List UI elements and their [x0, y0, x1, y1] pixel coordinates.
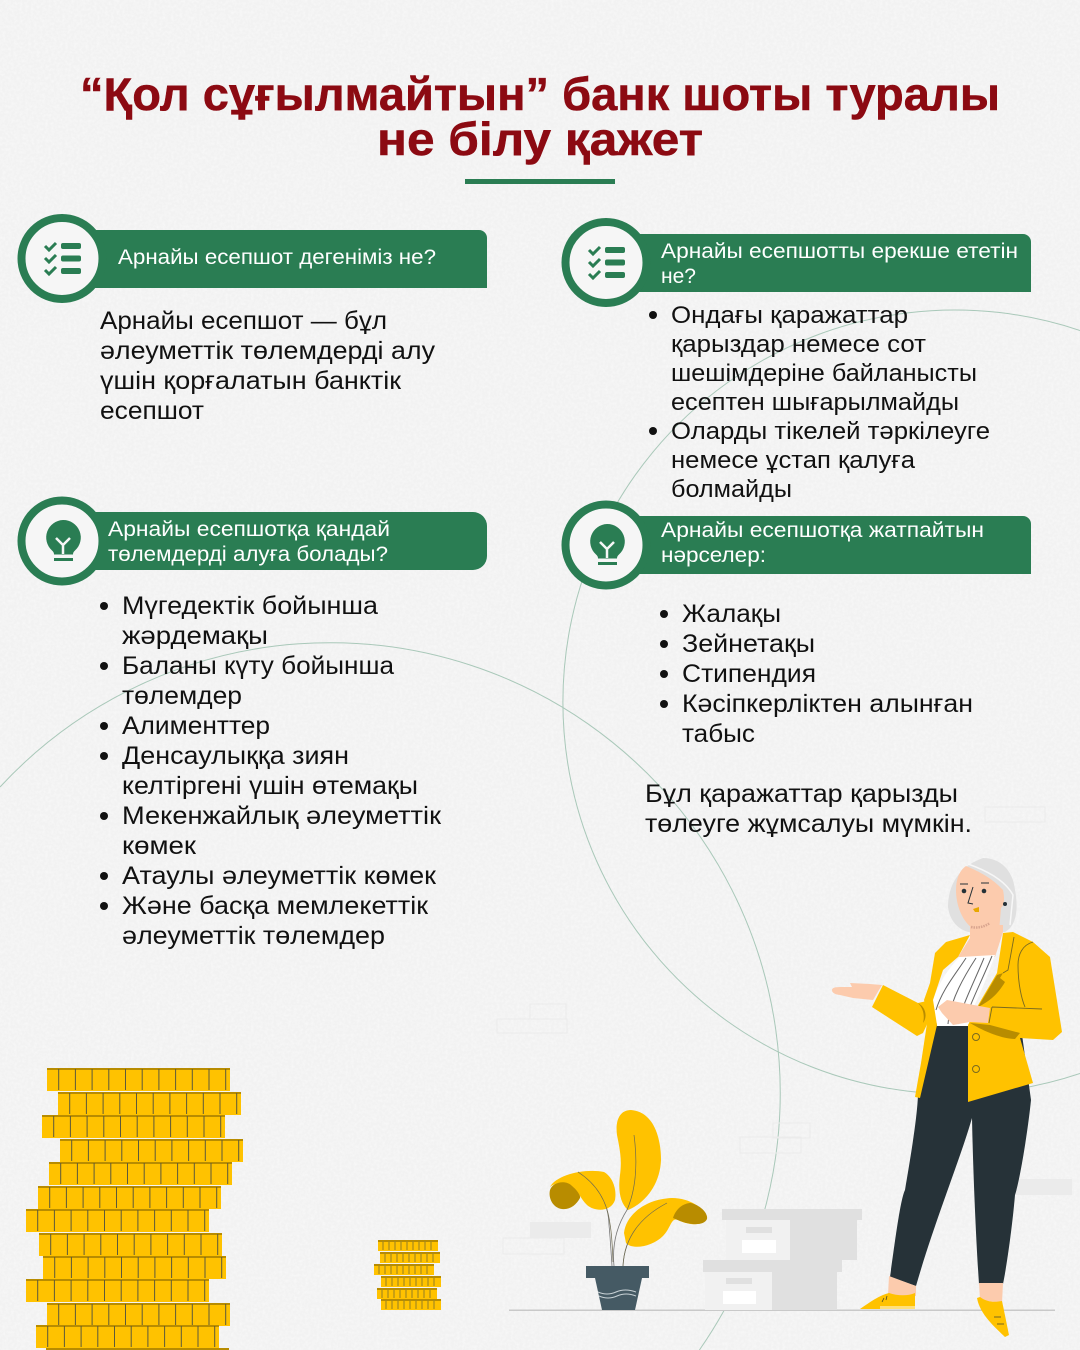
panel: what does not belong — [566, 504, 1031, 838]
left hand — [832, 983, 882, 1000]
faint background blocks — [497, 807, 1072, 1254]
list: payments: Атаулы әлеуметтік көмек — [122, 862, 437, 890]
face — [956, 866, 1004, 932]
hair — [948, 858, 1017, 933]
shoes — [860, 1293, 1009, 1337]
text: note on debt: төлеуге жұмсалуы мүмкін. — [645, 810, 972, 838]
text: note on debt: Бұл қаражаттар қарызды — [645, 780, 958, 808]
list: excluded income: Кәсіпкерліктен алынған — [682, 690, 973, 718]
icon: checklist — [45, 243, 81, 274]
header: eligible payments — [22, 500, 487, 582]
header: eligible payments: төлемдерді алуға болады? — [108, 542, 388, 566]
text: definition: Арнайы есепшот — бұл — [100, 307, 387, 335]
header: what does not belong: Арнайы есепшотқа жатпайтын — [661, 518, 984, 542]
header: what makes it special: не? — [661, 264, 696, 288]
text: note on debt — [645, 780, 972, 838]
jacket left panel — [915, 935, 970, 1098]
arm line — [1018, 942, 1033, 1007]
list: payments: келтіргені үшін өтемақы — [122, 772, 418, 800]
panel: what makes it special — [566, 222, 1031, 503]
illustration: small coin stack — [374, 1240, 441, 1310]
neck — [958, 925, 1003, 957]
list: payments: Денсаулыққа зиян — [122, 742, 349, 770]
list: features: қарыздар немесе сот — [671, 331, 926, 358]
text: definition: үшін қорғалатын банктік — [100, 367, 402, 395]
header: what makes it special: Арнайы есепшотты ерекше ететін — [661, 239, 1018, 263]
list: payments: көмек — [122, 832, 197, 860]
text: definition: есепшот — [100, 397, 205, 425]
icon: checklist — [589, 247, 625, 278]
header: what is a special account — [22, 218, 487, 299]
header: what is a special account: Арнайы есепшот дегеніміз не? — [118, 245, 436, 269]
list: excluded income: Стипендия — [682, 660, 816, 688]
title underline — [465, 179, 615, 184]
list: features: есептен шығарылмайды — [671, 389, 959, 416]
decorative circles — [0, 310, 1080, 1350]
list: payments: Мүгедектік бойынша — [122, 592, 378, 620]
list: features: болмайды — [671, 476, 792, 503]
header: what does not belong: нәрселер: — [661, 543, 766, 567]
list: excluded income: Зейнетақы — [682, 630, 815, 658]
jacket right panel — [968, 932, 1062, 1102]
list: payments: Алименттер — [122, 712, 270, 740]
eyes, nose, earring — [960, 883, 1007, 928]
ankles — [888, 1276, 1003, 1303]
list: features: немесе ұстап қалуға — [671, 447, 915, 474]
title: “Қол сұғылмайтын” банк шоты туралы — [80, 68, 1000, 120]
header: eligible payments: Арнайы есепшотқа қандай — [108, 517, 390, 541]
list: payments: Және басқа мемлекеттік — [122, 892, 429, 920]
right hand — [938, 1000, 990, 1025]
list: features — [649, 302, 990, 503]
jacket buttons — [972, 1034, 980, 1040]
lapel shadow — [978, 973, 1005, 1007]
list: payments — [100, 592, 442, 950]
legs — [890, 1020, 1031, 1286]
list: payments: Мекенжайлық әлеуметтік — [122, 802, 442, 830]
list: features: Ондағы қаражаттар — [671, 302, 908, 329]
title — [80, 68, 1000, 165]
illustration: woman in yellow jacket — [832, 858, 1062, 1337]
lapel line — [1003, 937, 1014, 973]
list: excluded income — [660, 600, 973, 748]
text: definition — [100, 307, 436, 425]
list: payments: төлемдер — [122, 682, 242, 710]
list: excluded income: табыс — [682, 720, 755, 748]
illustration: potted plant — [550, 1110, 707, 1310]
shirt — [933, 955, 995, 1026]
panel: eligible payments — [22, 500, 487, 950]
list: payments: Баланы күту бойынша — [122, 652, 394, 680]
list: payments: әлеуметтік төлемдер — [122, 922, 385, 950]
illustration: ground line — [509, 1310, 1055, 1311]
list: features: шешімдеріне байланысты — [671, 360, 977, 387]
list: features: Оларды тікелей тәркілеуге — [671, 418, 990, 445]
list: excluded income: Жалақы — [682, 600, 781, 628]
icon: light bulb — [46, 520, 81, 561]
shadow under hand — [970, 1023, 1020, 1039]
list: payments: жәрдемақы — [122, 622, 268, 650]
left sleeve — [872, 985, 931, 1036]
text: definition: әлеуметтік төлемдерді алу — [100, 337, 436, 365]
header: what does not belong — [566, 504, 1031, 586]
title: не білу қажет — [377, 113, 703, 165]
header: what makes it special — [566, 222, 1031, 303]
panel: what is a special account — [22, 218, 487, 425]
sleeve fold — [918, 1003, 926, 1023]
illustration: large coin stack — [26, 1068, 243, 1350]
cuff line — [989, 1007, 1042, 1023]
illustration: stacked boxes — [703, 1209, 862, 1310]
icon: light bulb — [590, 524, 625, 565]
